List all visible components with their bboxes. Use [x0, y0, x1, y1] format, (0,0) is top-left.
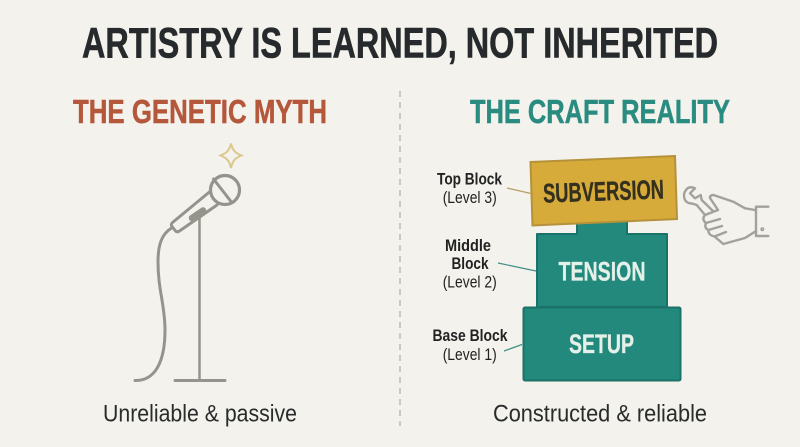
icon: sparkle: [220, 144, 242, 168]
caption: unreliable and passive: Unreliable & passive: [103, 400, 297, 428]
mic head: [210, 176, 240, 204]
icon: hand with wrench: [684, 187, 768, 244]
label: top block: Top Block: [437, 169, 502, 188]
label: middle block: [443, 236, 497, 292]
label: base block: Base Block: [432, 326, 508, 345]
label: middle block: Block: [452, 254, 489, 273]
cuff: [756, 207, 768, 236]
label: top block: (Level 3): [443, 188, 497, 207]
base block: setup: [524, 308, 680, 380]
label: base block: (Level 1): [443, 345, 497, 364]
mic body: [171, 192, 217, 232]
heading: the craft reality: THE CRAFT REALITY: [470, 93, 730, 130]
wrench: [684, 187, 714, 215]
heading: the genetic myth: THE GENETIC MYTH: [73, 93, 327, 130]
base block: setup: SETUP: [569, 329, 634, 359]
label: base block: [432, 326, 508, 364]
top block: subversion: SUBVERSION: [542, 174, 664, 209]
mic stand base: [175, 379, 225, 382]
mic clip: [192, 210, 203, 218]
middle block: tension: TENSION: [558, 256, 646, 286]
caption: constructed and reliable: Constructed & reliable: [493, 400, 707, 428]
block stack: [524, 156, 680, 380]
mic stand pole: [198, 216, 201, 380]
mic grille band: [214, 179, 231, 202]
icon: microphone on stand: [135, 176, 240, 381]
hand: [703, 195, 755, 244]
label: middle block: Middle: [445, 236, 491, 255]
label: top block: [437, 169, 502, 207]
top block: subversion: [530, 156, 677, 226]
label: middle block: (Level 2): [443, 272, 497, 292]
mic cable: [135, 228, 172, 381]
middle block: tension: [537, 218, 667, 307]
